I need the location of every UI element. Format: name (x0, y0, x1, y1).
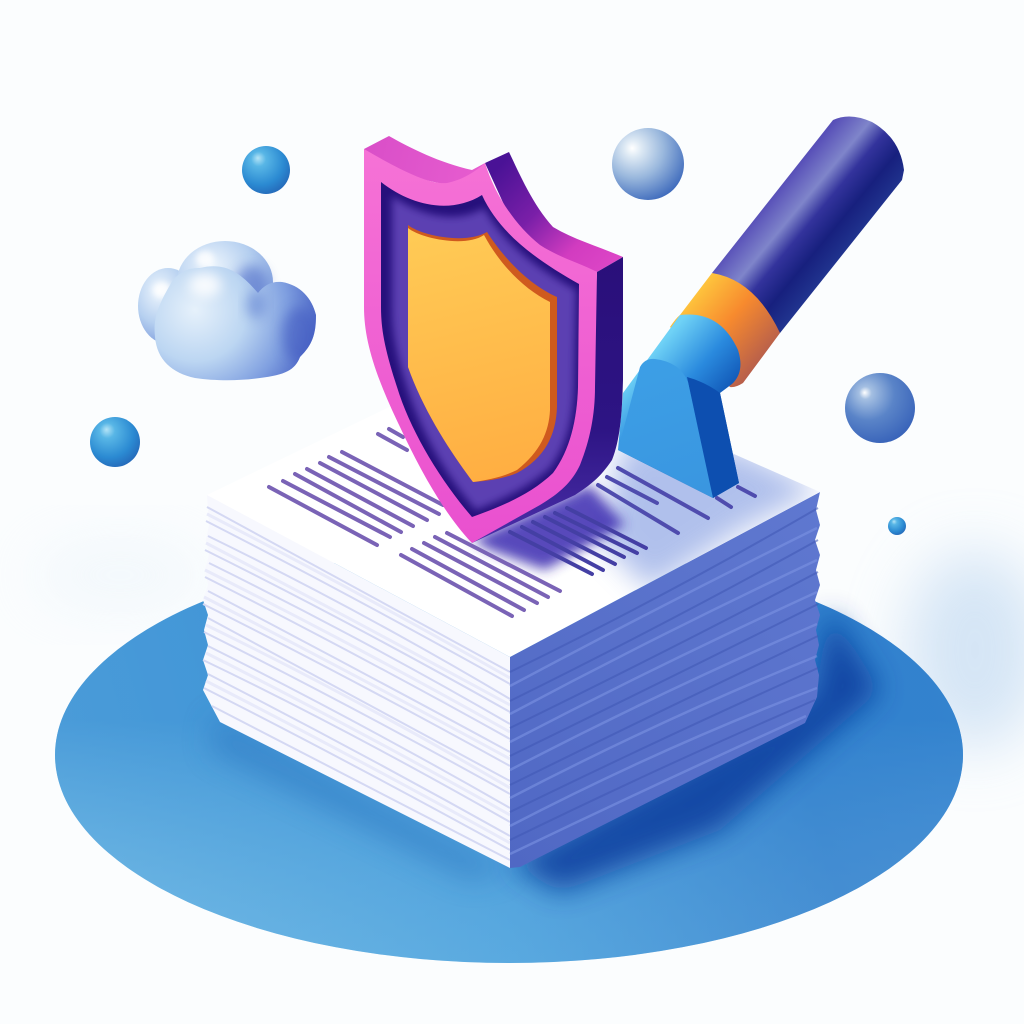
shield gold edge (408, 225, 557, 482)
sphere: top centre (612, 128, 684, 200)
shield upper side (485, 152, 623, 272)
paper stack shadow on disc (210, 610, 880, 892)
sphere: left (90, 417, 140, 467)
stack left face (203, 495, 510, 868)
shield inner panel (381, 182, 579, 517)
pen neck (618, 314, 740, 498)
text lines: first block (269, 429, 443, 545)
cloud front body (155, 266, 318, 380)
pen base face (618, 359, 713, 498)
pen tool (618, 116, 904, 498)
shield top edge (364, 136, 485, 190)
text lines: third block (510, 508, 646, 574)
pen base side (687, 377, 739, 498)
soft background glow (30, 540, 1024, 750)
pen barrel (712, 116, 904, 333)
shield front frame (364, 149, 597, 543)
pen band (670, 273, 780, 387)
text lines: second block (401, 533, 560, 616)
blue disc platform (55, 547, 963, 963)
sphere: small right (888, 517, 906, 535)
text lines: fourth block (598, 468, 755, 533)
stack right face (510, 492, 820, 868)
illustration: shield over a paper stack (55, 116, 1024, 963)
paper stack (202, 426, 820, 868)
stack top sheet (266, 426, 820, 657)
shield right side (472, 257, 623, 543)
cloud back lobes (138, 241, 273, 344)
shield (364, 136, 623, 543)
sphere: top left (242, 146, 290, 194)
cloud (138, 241, 318, 380)
shield gold face (408, 228, 550, 482)
sphere: right (845, 373, 915, 443)
